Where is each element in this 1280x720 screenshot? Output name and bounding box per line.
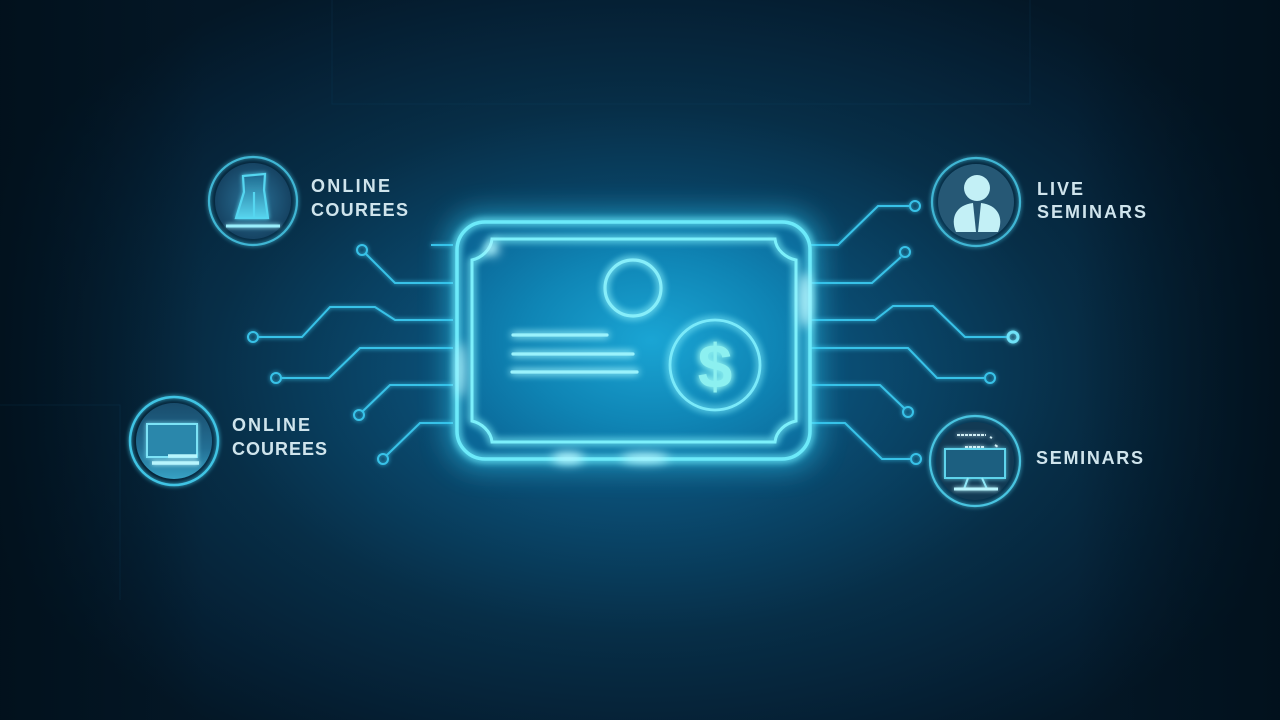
icon: flask on base [226,174,280,226]
right circuit traces [811,201,1018,464]
icon: monitor [945,435,1005,489]
card portrait circle [605,260,661,316]
card dollar seal [670,320,760,410]
label: COUREES [232,439,327,459]
card light flares [457,242,811,464]
label: ONLINE [311,176,390,196]
left circuit traces [248,245,453,464]
node: seminars bottom right [930,416,1143,506]
card inner ornamental frame [472,239,796,442]
label [1037,179,1146,222]
card dollar seal: $ [698,333,732,402]
icon: laptop [147,424,199,463]
label [232,415,327,459]
label: LIVE [1037,179,1083,199]
label: ONLINE [232,415,310,435]
node: live seminars top right [932,158,1146,246]
label: COUREES [311,200,408,220]
label [311,176,408,220]
label: SEMINARS [1036,448,1143,468]
card text lines [512,335,637,372]
icon: person [954,175,1000,232]
label: SEMINARS [1037,202,1146,222]
central certificate card [448,213,819,468]
node: online courses top left [209,157,408,245]
node: online courses bottom left [130,397,327,485]
